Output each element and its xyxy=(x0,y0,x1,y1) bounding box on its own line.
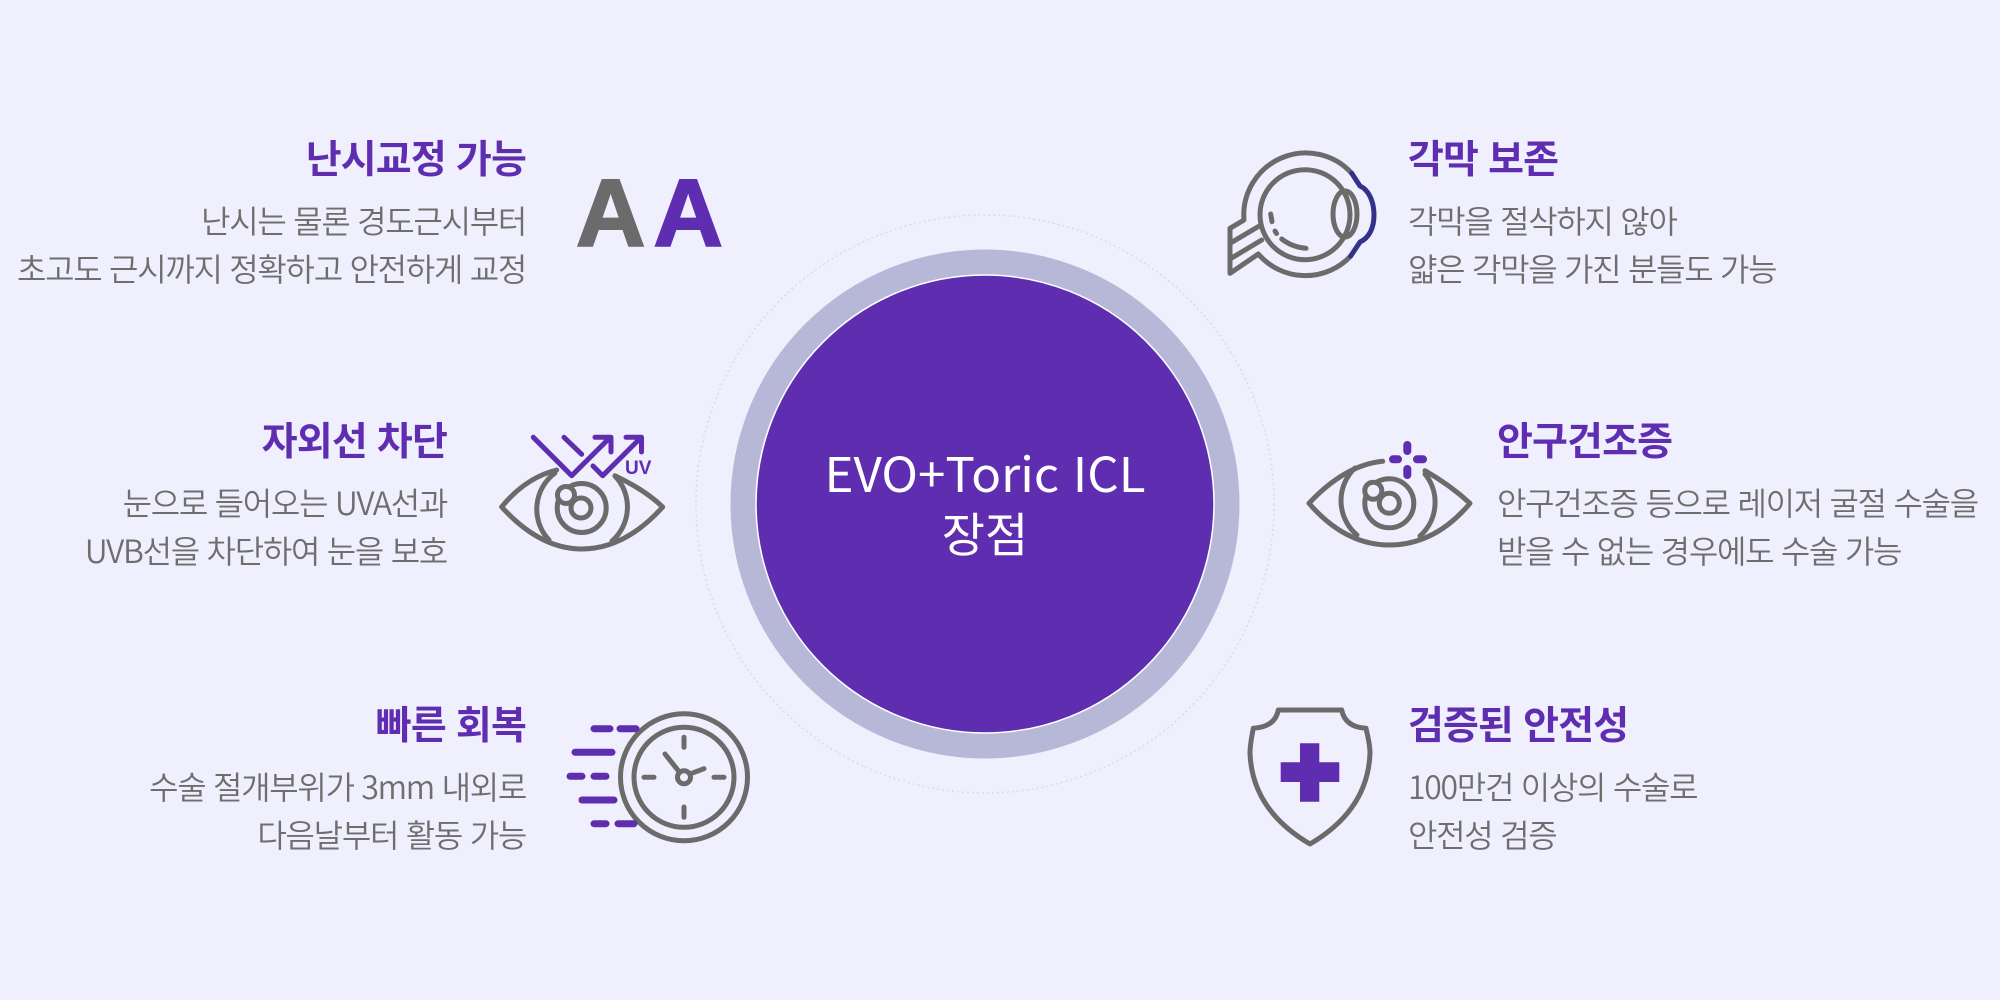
text block: astigmatism correction: 초고도 근시까지 정확하고 안전하게 교정 xyxy=(17,245,526,291)
icon: eye side view xyxy=(1230,153,1374,276)
icon: clock with speed lines xyxy=(570,714,748,841)
text block: fast recovery: 수술 절개부위가 3mm 내외로 xyxy=(149,763,526,809)
icon: AA letters: A xyxy=(654,160,723,267)
lavender ring xyxy=(744,263,1226,745)
purple circle xyxy=(756,275,1214,733)
icon: AA letters xyxy=(576,160,723,267)
text block: fast recovery xyxy=(149,695,526,857)
center title: 장점 xyxy=(942,497,1028,566)
text block: proven safety: 안전성 검증 xyxy=(1408,811,1556,857)
text block: proven safety xyxy=(1408,695,1697,857)
heading: 안구건조증 xyxy=(1497,411,1672,467)
text block: fast recovery: 다음날부터 활동 가능 xyxy=(257,811,526,857)
text block: dry eye: 받을 수 없는 경우에도 수술 가능 xyxy=(1497,527,1901,573)
heading: 자외선 차단 xyxy=(262,411,447,467)
heading: 각막 보존 xyxy=(1408,129,1558,185)
heading: 난시교정 가능 xyxy=(306,129,526,185)
text block: dry eye: 안구건조증 등으로 레이저 굴절 수술을 xyxy=(1497,479,1978,525)
text block: proven safety: 100만건 이상의 수술로 xyxy=(1408,763,1697,809)
text block: UV protection xyxy=(85,411,448,573)
text block: UV protection: UVB선을 차단하여 눈을 보호 xyxy=(85,527,447,573)
dotted outer ring xyxy=(696,215,1274,793)
text block: cornea preservation: 얇은 각막을 가진 분들도 가능 xyxy=(1408,245,1776,291)
icon: shield with cross xyxy=(1250,710,1370,844)
icon: AA letters: A xyxy=(576,160,645,267)
text block: cornea preservation: 각막을 절삭하지 않아 xyxy=(1408,197,1677,243)
text block: cornea preservation xyxy=(1408,129,1776,291)
UV label: UV xyxy=(625,458,652,479)
text block: dry eye xyxy=(1497,411,1978,573)
text block: astigmatism correction: 난시는 물론 경도근시부터 xyxy=(201,197,526,243)
icon: dry eye xyxy=(1309,445,1470,545)
icon: UV eye xyxy=(502,437,663,549)
text block: astigmatism correction xyxy=(17,129,526,291)
center title: EVO+Toric ICL xyxy=(824,436,1146,506)
heading: 검증된 안전성 xyxy=(1408,695,1628,751)
text block: UV protection: 눈으로 들어오는 UVA선과 xyxy=(123,479,447,525)
heading: 빠른 회복 xyxy=(376,695,526,751)
center title xyxy=(824,436,1146,566)
